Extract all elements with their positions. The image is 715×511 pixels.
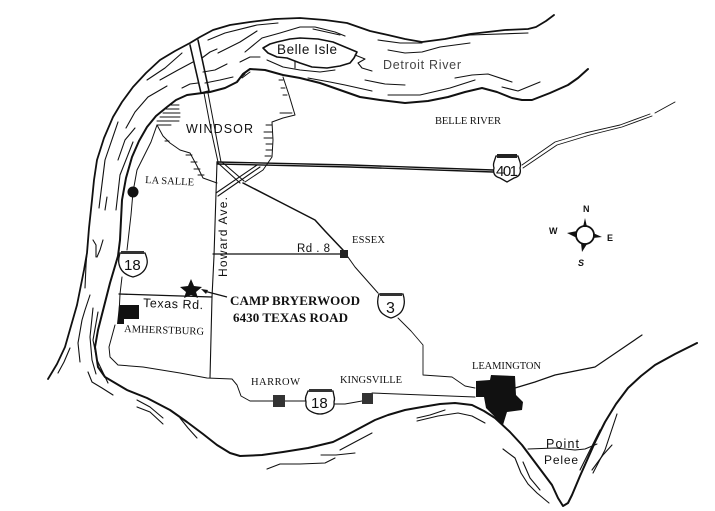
- Texas Road label: Texas Rd.: [143, 296, 203, 312]
- road network: [109, 40, 675, 404]
- Highway 18 shield south: [306, 389, 334, 414]
- Texas Road: [119, 294, 212, 297]
- road north into Windsor: [204, 93, 221, 162]
- Amherstburg label: AMHERSTBURG: [124, 324, 205, 338]
- Howard Avenue: [210, 162, 217, 378]
- compass rose: N: [583, 204, 590, 214]
- Kingsville marker: [362, 393, 373, 404]
- Harrow label: HARROW: [251, 377, 300, 388]
- Essex label: ESSEX: [352, 235, 385, 246]
- Road 8: [213, 253, 340, 255]
- Highway 18 shield south: 18: [311, 395, 328, 412]
- Amherstburg marker: [117, 305, 139, 324]
- Windsor label: WINDSOR: [186, 122, 253, 136]
- Howard Ave label: Howard Ave.: [216, 197, 230, 277]
- compass rose: [549, 204, 613, 268]
- Highway 401: [217, 162, 493, 172]
- Essex town marker: [340, 250, 348, 258]
- arrow to camp: [201, 289, 227, 297]
- Point Pelee label: Point: [546, 437, 580, 451]
- Point Pelee label: Pelee: [544, 453, 578, 467]
- Highway 401 shield: [494, 154, 520, 182]
- river current strokes: [58, 23, 617, 503]
- Highway 401 shield: 401: [496, 163, 518, 180]
- boundary hatching: [157, 72, 292, 175]
- Point Pelee boundary: [528, 444, 597, 450]
- La Salle marker: [128, 186, 138, 198]
- Detroit River label: Detroit River: [383, 58, 461, 72]
- camp name and address: [230, 293, 360, 325]
- bridge: [190, 40, 209, 93]
- Road 8 label: Rd . 8: [297, 243, 330, 255]
- Highway 18 shield north: [119, 251, 147, 277]
- compass rose: W: [549, 226, 558, 236]
- camp name and address: CAMP BRYERWOOD: [230, 293, 360, 308]
- Highway 3 shield: [378, 293, 404, 318]
- Windsor city boundary: [157, 72, 295, 183]
- Point Pelee label: [544, 437, 580, 467]
- interchange ramps: [216, 162, 260, 196]
- Belle River label: BELLE RIVER: [435, 116, 501, 127]
- La Salle label: LA SALLE: [145, 175, 194, 189]
- compass rose: S: [578, 258, 584, 268]
- camp name and address: 6430 TEXAS ROAD: [233, 310, 348, 325]
- Highway 3 shield: 3: [386, 300, 395, 317]
- Highway 3: [243, 183, 343, 250]
- Belle Isle island: Belle Isle: [277, 42, 337, 57]
- Kingsville label: KINGSVILLE: [340, 375, 402, 386]
- Harrow marker: [273, 395, 285, 407]
- compass rose: E: [607, 233, 613, 243]
- Leamington marker: [476, 375, 523, 425]
- Highway 18: [127, 125, 157, 250]
- Camp Bryerwood star: [180, 279, 202, 298]
- Belle Isle island: [263, 38, 357, 68]
- Leamington label: LEAMINGTON: [472, 361, 541, 372]
- Highway 18 shield north: 18: [124, 257, 141, 274]
